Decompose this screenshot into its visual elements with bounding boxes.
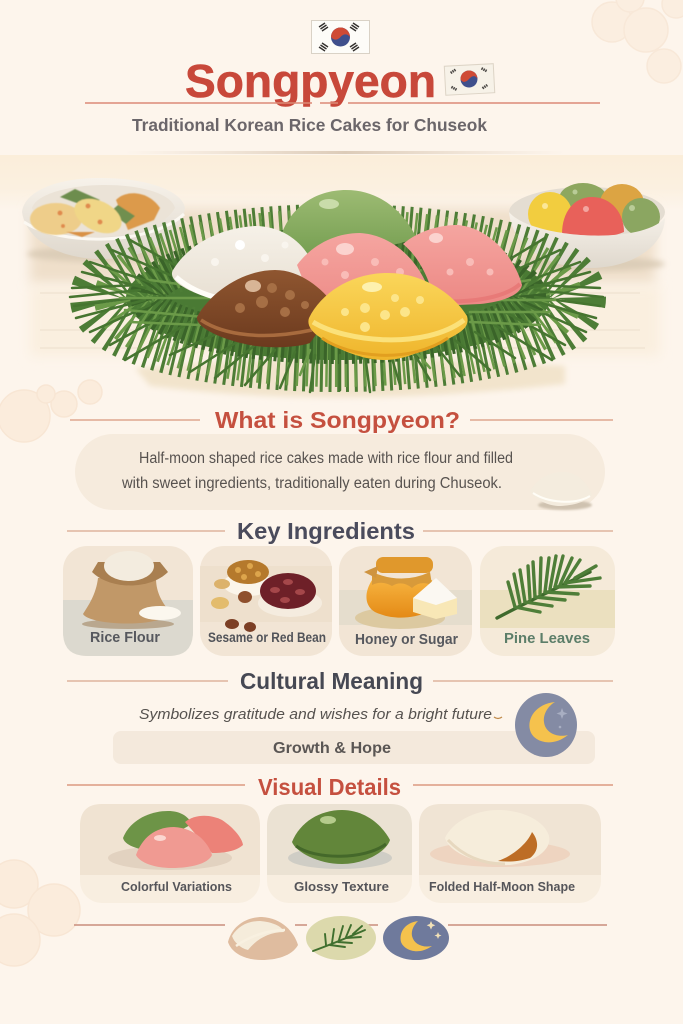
section rules — [67, 530, 613, 532]
decorative lattice: left middle — [0, 380, 102, 442]
cake: green — [281, 190, 416, 266]
label: Pine Leaves — [504, 631, 590, 647]
label: Rice Flour — [90, 630, 160, 646]
hero illustration — [0, 155, 683, 398]
card: folded half-moon shape — [419, 804, 601, 903]
decorative lattice: bottom left — [0, 860, 80, 966]
banner: growth and hope — [113, 731, 595, 764]
cake: white — [172, 226, 313, 302]
hero backdrop — [0, 155, 683, 210]
icon: Korean flag wavy — [444, 64, 495, 95]
label: Folded Half-Moon Shape — [429, 879, 575, 894]
title group — [85, 20, 600, 154]
heading: Key Ingredients: Key Ingredients — [237, 518, 415, 544]
cake: yellow — [308, 273, 468, 360]
description text: with sweet ingredients, traditionally eaten during Chuseok. — [121, 475, 502, 492]
heading: Visual Details: Visual Details — [258, 774, 401, 800]
section: visual details — [67, 774, 613, 903]
cake: brown — [197, 270, 335, 347]
card: sesame or red bean — [200, 546, 332, 656]
icon: rice cake badge — [228, 917, 298, 960]
description text — [121, 450, 513, 492]
meaning sentence: Symbolizes gratitude and wishes for a bright future — [139, 706, 492, 723]
section rules — [70, 419, 613, 421]
table band — [30, 208, 660, 398]
heading: What is Songpyeon?: What is Songpyeon? — [215, 407, 460, 433]
cake: right pink — [403, 225, 522, 306]
icon: moon badge — [383, 916, 449, 960]
footer rules — [74, 924, 607, 926]
footer ornament — [74, 916, 607, 960]
icon: moon badge — [515, 693, 577, 757]
card: honey or sugar — [339, 546, 472, 656]
card: glossy texture — [267, 804, 412, 903]
card: colorful variations — [80, 804, 260, 903]
pine needle mat — [70, 236, 603, 392]
label: Sesame or Red Bean — [208, 630, 326, 645]
icon: small white rice cake — [530, 472, 592, 510]
subtitle: Traditional Korean Rice Cakes for Chuseok — [132, 115, 487, 135]
heading: Cultural Meaning: Cultural Meaning — [240, 668, 423, 694]
left bowl of sliced rice cakes — [22, 178, 185, 262]
section: what is songpyeon — [70, 407, 613, 510]
heading: Songpyeon: Songpyeon — [185, 55, 436, 107]
section rules — [67, 680, 613, 682]
section rules — [67, 784, 613, 786]
divider under title — [85, 102, 600, 104]
description text: Half-moon shaped rice cakes made with rice flour and filled — [139, 450, 513, 467]
label: Colorful Variations — [121, 879, 232, 894]
description pill — [75, 434, 605, 510]
cake: middle pink — [297, 233, 433, 320]
section: key ingredients — [63, 518, 615, 656]
card: pine leaves — [480, 546, 615, 656]
section: cultural meaning — [67, 668, 613, 764]
label: Glossy Texture — [294, 879, 389, 894]
icon: Korean flag top — [312, 20, 370, 54]
card: rice flour — [63, 546, 193, 656]
icon: pine badge — [306, 916, 376, 960]
banner: growth and hope: Growth & Hope — [273, 740, 391, 757]
right bowl of round rice cakes — [509, 183, 665, 271]
decorative lattice: top right — [592, 0, 683, 83]
label: Honey or Sugar — [355, 632, 458, 648]
